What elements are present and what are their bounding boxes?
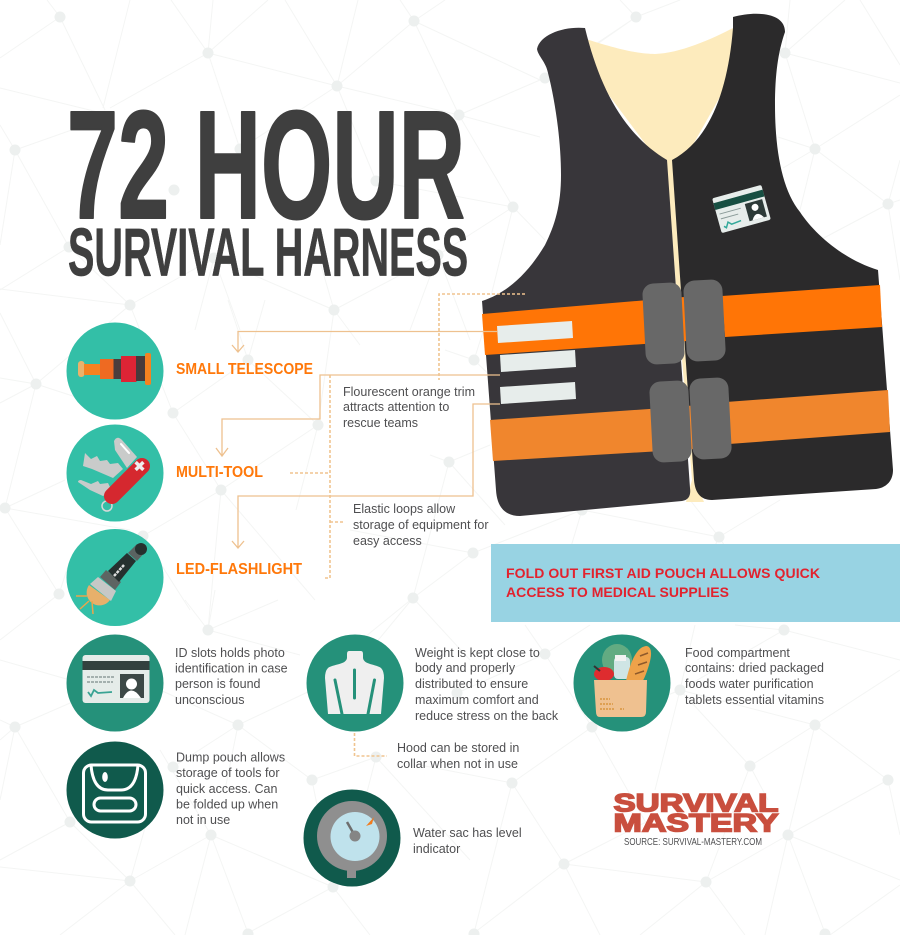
food compartment item bbox=[574, 634, 827, 732]
elastic loops bbox=[497, 321, 576, 404]
connector: multi-tool bbox=[216, 375, 500, 456]
text: id slots: unconscious bbox=[175, 693, 244, 707]
text: weight distribution: distributed to ensure bbox=[415, 677, 528, 691]
id card on vest bbox=[712, 185, 771, 233]
note: orange trim: Flourescent orange trim bbox=[343, 385, 475, 399]
text: food compartment: foods water purification bbox=[685, 677, 814, 691]
note: elastic loops: Elastic loops allow bbox=[353, 502, 456, 516]
text: weight distribution: body and properly bbox=[415, 661, 516, 675]
vest illustration bbox=[482, 14, 893, 516]
text: id slots: person is found bbox=[175, 677, 261, 691]
vest left panel bbox=[482, 28, 690, 516]
logo: survival mastery: MASTERY bbox=[614, 810, 779, 838]
text: food compartment: contains: dried packaged bbox=[685, 661, 824, 675]
orange trim lower bbox=[490, 390, 890, 461]
text: id slots: ID slots holds photo bbox=[175, 646, 285, 660]
text: hood: collar when not in use bbox=[397, 757, 518, 771]
connector: orange trim note bbox=[439, 294, 525, 380]
connector: flashlight bbox=[232, 404, 500, 548]
multi-tool item bbox=[66, 424, 263, 522]
connector: hood note bbox=[354, 733, 387, 756]
water sac item bbox=[304, 790, 525, 886]
text: dump pouch: be folded up when bbox=[176, 798, 278, 812]
label: led-flashlight: LED-FLASHLIGHT bbox=[176, 561, 302, 578]
text: food compartment: tablets essential vitamins bbox=[685, 693, 824, 707]
vest collar lining bbox=[586, 27, 735, 502]
icon: gauge bbox=[304, 790, 400, 886]
text: dump pouch: not in use bbox=[176, 813, 230, 827]
note: orange trim: attracts attention to bbox=[343, 400, 449, 414]
text: id slots: identification in case bbox=[175, 662, 288, 676]
connector: telescope bbox=[232, 332, 497, 352]
text: dump pouch: Dump pouch allows bbox=[176, 750, 285, 764]
text: food compartment: Food compartment bbox=[685, 646, 790, 660]
note: orange trim: rescue teams bbox=[343, 416, 418, 430]
note: elastic loops: storage of equipment for bbox=[353, 518, 488, 532]
dump pouch item bbox=[66, 742, 289, 838]
source: SOURCE: SURVIVAL-MASTERY.COM bbox=[624, 837, 762, 848]
connector: elastic loops note bbox=[290, 375, 343, 578]
icon: dump pouch bbox=[66, 742, 164, 838]
logo: survival mastery: SURVIVAL bbox=[614, 790, 778, 818]
logo: survival mastery bbox=[614, 790, 779, 838]
text: weight distribution: Weight is kept close to bbox=[415, 646, 540, 660]
text: dump pouch: quick access. Can bbox=[176, 782, 277, 796]
weight distribution item bbox=[306, 634, 559, 732]
buckles bbox=[642, 279, 732, 463]
telescope item bbox=[66, 322, 313, 420]
label: multi-tool: MULTI-TOOL bbox=[176, 464, 263, 481]
icon: multi-tool bbox=[66, 424, 164, 522]
icon: telescope bbox=[66, 322, 164, 420]
note: elastic loops: easy access bbox=[353, 534, 422, 548]
flashlight item bbox=[66, 529, 302, 626]
text: weight distribution: reduce stress on the back bbox=[415, 709, 559, 723]
text: weight distribution: maximum comfort and bbox=[415, 693, 539, 707]
icon: id card bbox=[66, 634, 164, 732]
icon: back bbox=[306, 634, 404, 732]
text: water sac: indicator bbox=[413, 842, 460, 856]
text: hood: Hood can be stored in bbox=[397, 741, 519, 755]
text: water sac: Water sac has level bbox=[413, 826, 522, 840]
icon: flashlight bbox=[66, 529, 164, 626]
id slots item bbox=[66, 634, 291, 732]
vest right panel bbox=[672, 14, 893, 500]
orange trim upper bbox=[482, 285, 882, 355]
connector lines bbox=[216, 294, 525, 756]
callout: first aid pouch bbox=[491, 544, 900, 622]
callout: first aid pouch: FOLD OUT FIRST AID POUCH ALLOWS QUICK bbox=[506, 565, 820, 581]
text: dump pouch: storage of tools for bbox=[176, 766, 280, 780]
title bbox=[67, 79, 468, 290]
icon: food bag bbox=[574, 634, 670, 732]
label: small telescope: SMALL TELESCOPE bbox=[176, 361, 313, 378]
callout: first aid pouch: ACCESS TO MEDICAL SUPPLIES bbox=[506, 584, 729, 600]
